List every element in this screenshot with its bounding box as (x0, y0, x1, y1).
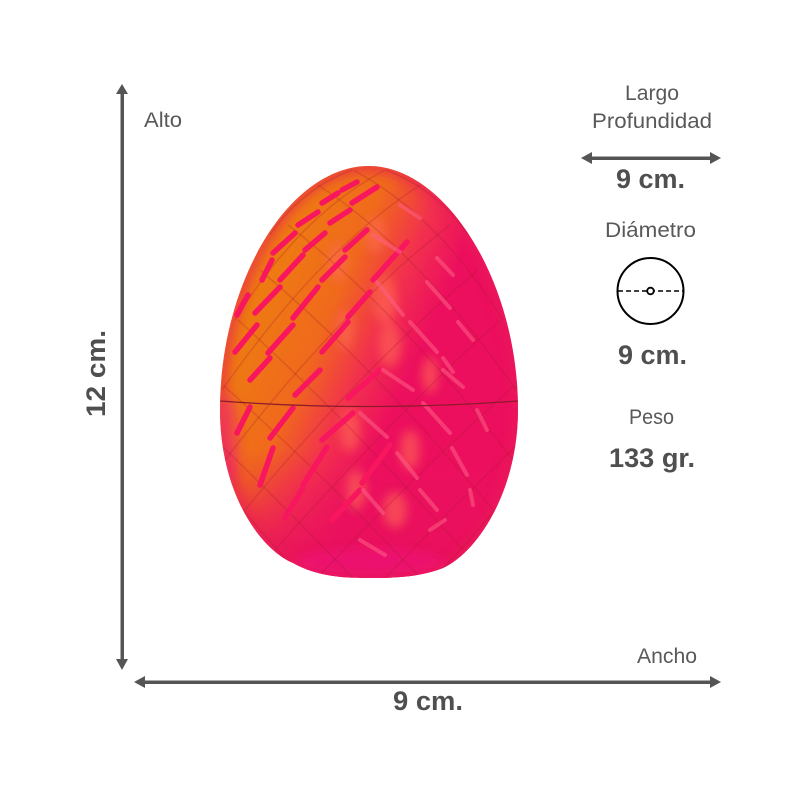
egg photo illustration (210, 160, 530, 585)
arrow: height (116, 84, 128, 670)
label: Diámetro: Diámetro (605, 219, 696, 242)
value: diameter 9 cm: 9 cm. (618, 340, 687, 370)
label: Profundidad: Profundidad (592, 110, 712, 133)
seam line (220, 401, 518, 406)
label: Ancho: Ancho (637, 645, 697, 668)
scale ridges left (235, 182, 407, 520)
value: depth 9 cm: 9 cm. (616, 164, 685, 194)
value: 12 cm: 12 cm. (81, 330, 111, 417)
icon: diameter circle (618, 258, 684, 324)
scale ridges right (360, 205, 487, 555)
arrow: depth (581, 152, 721, 164)
label: Largo: Largo (625, 82, 679, 105)
arrow: width (134, 676, 721, 688)
label: Peso: Peso (629, 406, 674, 429)
value: 133 gr: 133 gr. (609, 443, 695, 473)
label: Alto: Alto (144, 109, 182, 132)
scale lattice (221, 170, 517, 578)
value: width 9 cm: 9 cm. (393, 686, 463, 716)
